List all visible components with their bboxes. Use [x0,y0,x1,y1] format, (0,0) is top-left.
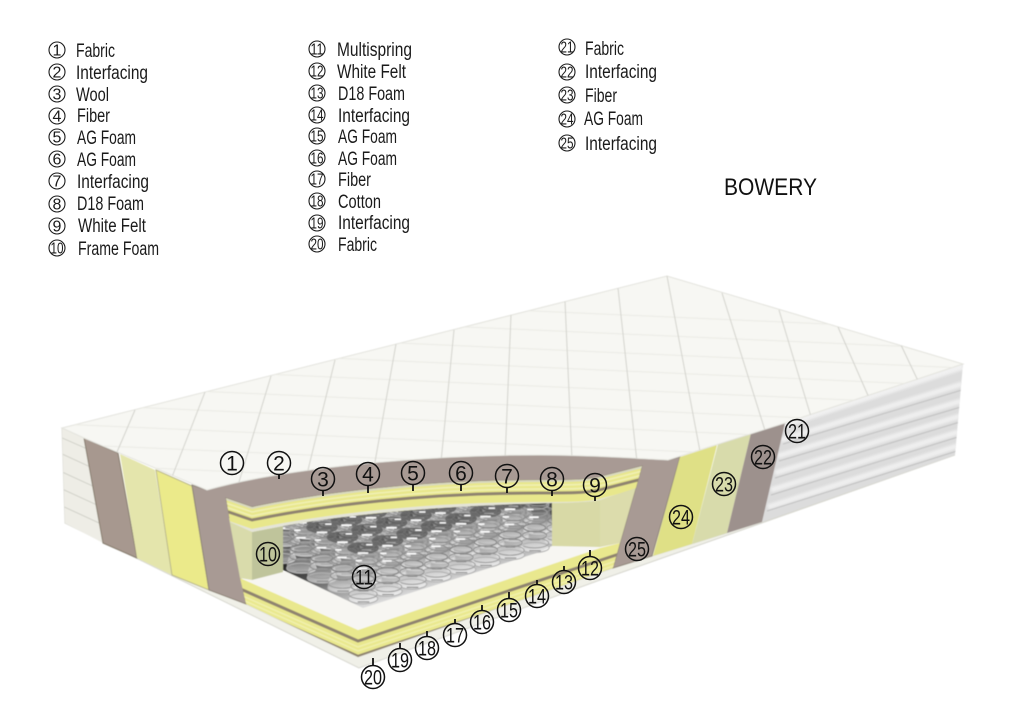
legend item 16: 16 [310,150,324,168]
callout 3: 3 [317,468,329,492]
left quilted side face [63,438,102,542]
legend item 14 [309,106,410,127]
shadow behind springs [283,495,552,608]
callout 19: 19 [391,650,409,672]
callout 19 [388,643,412,672]
legend item 7: Interfacing [77,172,149,193]
legend item 7: 7 [53,174,62,190]
callout 23: 23 [715,474,733,496]
legend item 8: 8 [53,196,62,214]
callout 10: 10 [259,544,277,566]
legend item 23: 23 [560,88,574,104]
legend item 24: 24 [560,112,574,128]
legend item 7 [49,172,149,193]
left fabric band [84,438,137,558]
legend item 20 [309,235,377,256]
callout 21: 21 [788,420,806,444]
legend item 2: 2 [53,64,62,82]
callout 4: 4 [362,464,374,486]
legend item 22: 22 [560,64,574,82]
legend item 18 [309,192,381,213]
legend item 20: Fabric [338,235,377,256]
legend item 9 [49,216,147,237]
legend item 3: 3 [53,86,62,104]
legend column 2 [309,40,412,256]
legend item 13: 13 [310,86,324,102]
callout 1 [220,452,244,476]
legend item 10: Frame Foam [78,239,159,260]
callout 15: 15 [500,600,518,622]
callout 8: 8 [546,468,558,492]
legend item 5: AG Foam [77,128,136,149]
callout 16: 16 [473,612,491,634]
callout 20: 20 [364,666,382,690]
white felt floor [240,543,620,630]
callout 13: 13 [555,572,573,594]
mattress outer shell: bottom edge [62,428,955,668]
upper foam layers [220,465,650,532]
legend item 23: Fiber [585,86,617,107]
legend item 19: Interfacing [338,213,410,234]
legend item 19 [309,213,410,234]
legend item 25: 25 [560,136,574,152]
legend item 11: Multispring [337,40,412,61]
legend item 15: 15 [310,128,324,146]
callout 14 [526,580,548,608]
callout 22: 22 [754,446,772,470]
left foam band [156,470,209,590]
legend column 1 [49,41,159,260]
legend item 3 [49,85,109,106]
legend item 17: Fiber [338,170,372,191]
title: BOWERY: BOWERY [724,174,817,201]
legend item 18: 18 [310,194,324,210]
legend item 9: 9 [53,218,62,236]
callout 15 [498,592,520,622]
legend item 19: 19 [310,216,324,232]
legend item 17 [309,170,372,191]
callout 12 [578,550,602,580]
callout 3 [312,468,334,496]
legend item 15: AG Foam [338,127,397,148]
callout 7: 7 [501,466,513,488]
callout 6 [450,462,472,491]
callout 12: 12 [581,558,599,580]
callout 20 [362,658,384,690]
legend item 8: D18 Foam [77,194,144,215]
callout 9: 9 [589,474,601,498]
callout 2 [268,452,290,479]
legend item 1 [49,41,115,62]
callout 25: 25 [628,538,646,562]
frame foam right [552,487,636,547]
legend item 6: 6 [53,152,62,168]
legend item 3: Wool [76,85,109,106]
legend item 23 [559,86,617,107]
legend item 21: 21 [560,40,574,56]
legend item 12: 12 [310,64,324,80]
callout 14: 14 [528,586,546,608]
frame foam left [229,518,283,580]
callout 8 [540,468,564,496]
legend item 12 [309,62,407,83]
legend item 5: 5 [53,130,62,146]
right quilted side face [762,364,963,522]
callout 17 [444,619,466,648]
legend item 11: 11 [310,42,324,58]
callout 6: 6 [455,462,467,486]
callout 2: 2 [273,452,285,476]
legend item 1: Fabric [76,41,115,62]
mattress cutaway illustration [60,276,963,668]
legend item 17: 17 [310,172,324,188]
legend item 14: Interfacing [338,106,410,127]
callout 4 [356,462,380,493]
legend item 22: Interfacing [585,62,657,83]
legend item 24: AG Foam [584,109,643,130]
callout 5: 5 [407,462,419,486]
legend item 15 [309,127,397,148]
legend item 6 [49,150,136,171]
legend column 3 [559,39,657,155]
legend item 10: 10 [50,240,64,258]
legend item 11 [309,40,412,61]
legend item 12: White Felt [337,62,407,83]
callout 13 [552,566,576,594]
legend item 13 [309,84,405,105]
legend item 2 [49,63,148,84]
callout 11: 11 [355,566,373,590]
legend item 21: Fabric [585,39,624,60]
legend item 4: Fiber [77,106,111,127]
legend item 24 [559,109,643,130]
callout 18 [416,631,438,660]
legend item 25 [559,134,657,155]
legend item 4: 4 [53,108,62,126]
right fabric band [727,423,785,533]
left fiber band [120,454,172,575]
callout 9 [584,474,606,501]
legend item 2: Interfacing [76,63,148,84]
legend item 4 [49,106,111,127]
legend item 20: 20 [310,236,324,254]
callout 16 [470,605,494,634]
legend item 18: Cotton [338,192,381,213]
legend item 1: 1 [53,42,62,60]
callout 18: 18 [418,638,436,660]
callout markers [220,420,808,690]
legend item 16: AG Foam [338,149,397,170]
legend item 6: AG Foam [77,150,136,171]
callout 1: 1 [226,452,238,476]
legend item 14: 14 [310,108,324,124]
legend item 25: Interfacing [585,134,657,155]
legend item 9: White Felt [78,216,147,237]
callout 24: 24 [672,506,690,530]
callout 17: 17 [446,624,464,648]
interfacing brown cut wall [192,455,680,604]
callout 7 [496,464,518,493]
right foam band [653,445,717,556]
callout 5 [402,462,424,491]
lower foam layers [236,543,625,657]
legend item 13: D18 Foam [338,84,405,105]
multispring coil grid [282,502,552,604]
quilted top surface [60,276,963,504]
right fiber band [692,433,751,544]
legend item 10 [49,239,159,260]
legend item 21 [559,39,624,60]
legend item 16 [309,149,397,170]
legend item 22 [559,62,657,83]
legend item 8 [49,194,144,215]
legend item 5 [49,128,136,149]
